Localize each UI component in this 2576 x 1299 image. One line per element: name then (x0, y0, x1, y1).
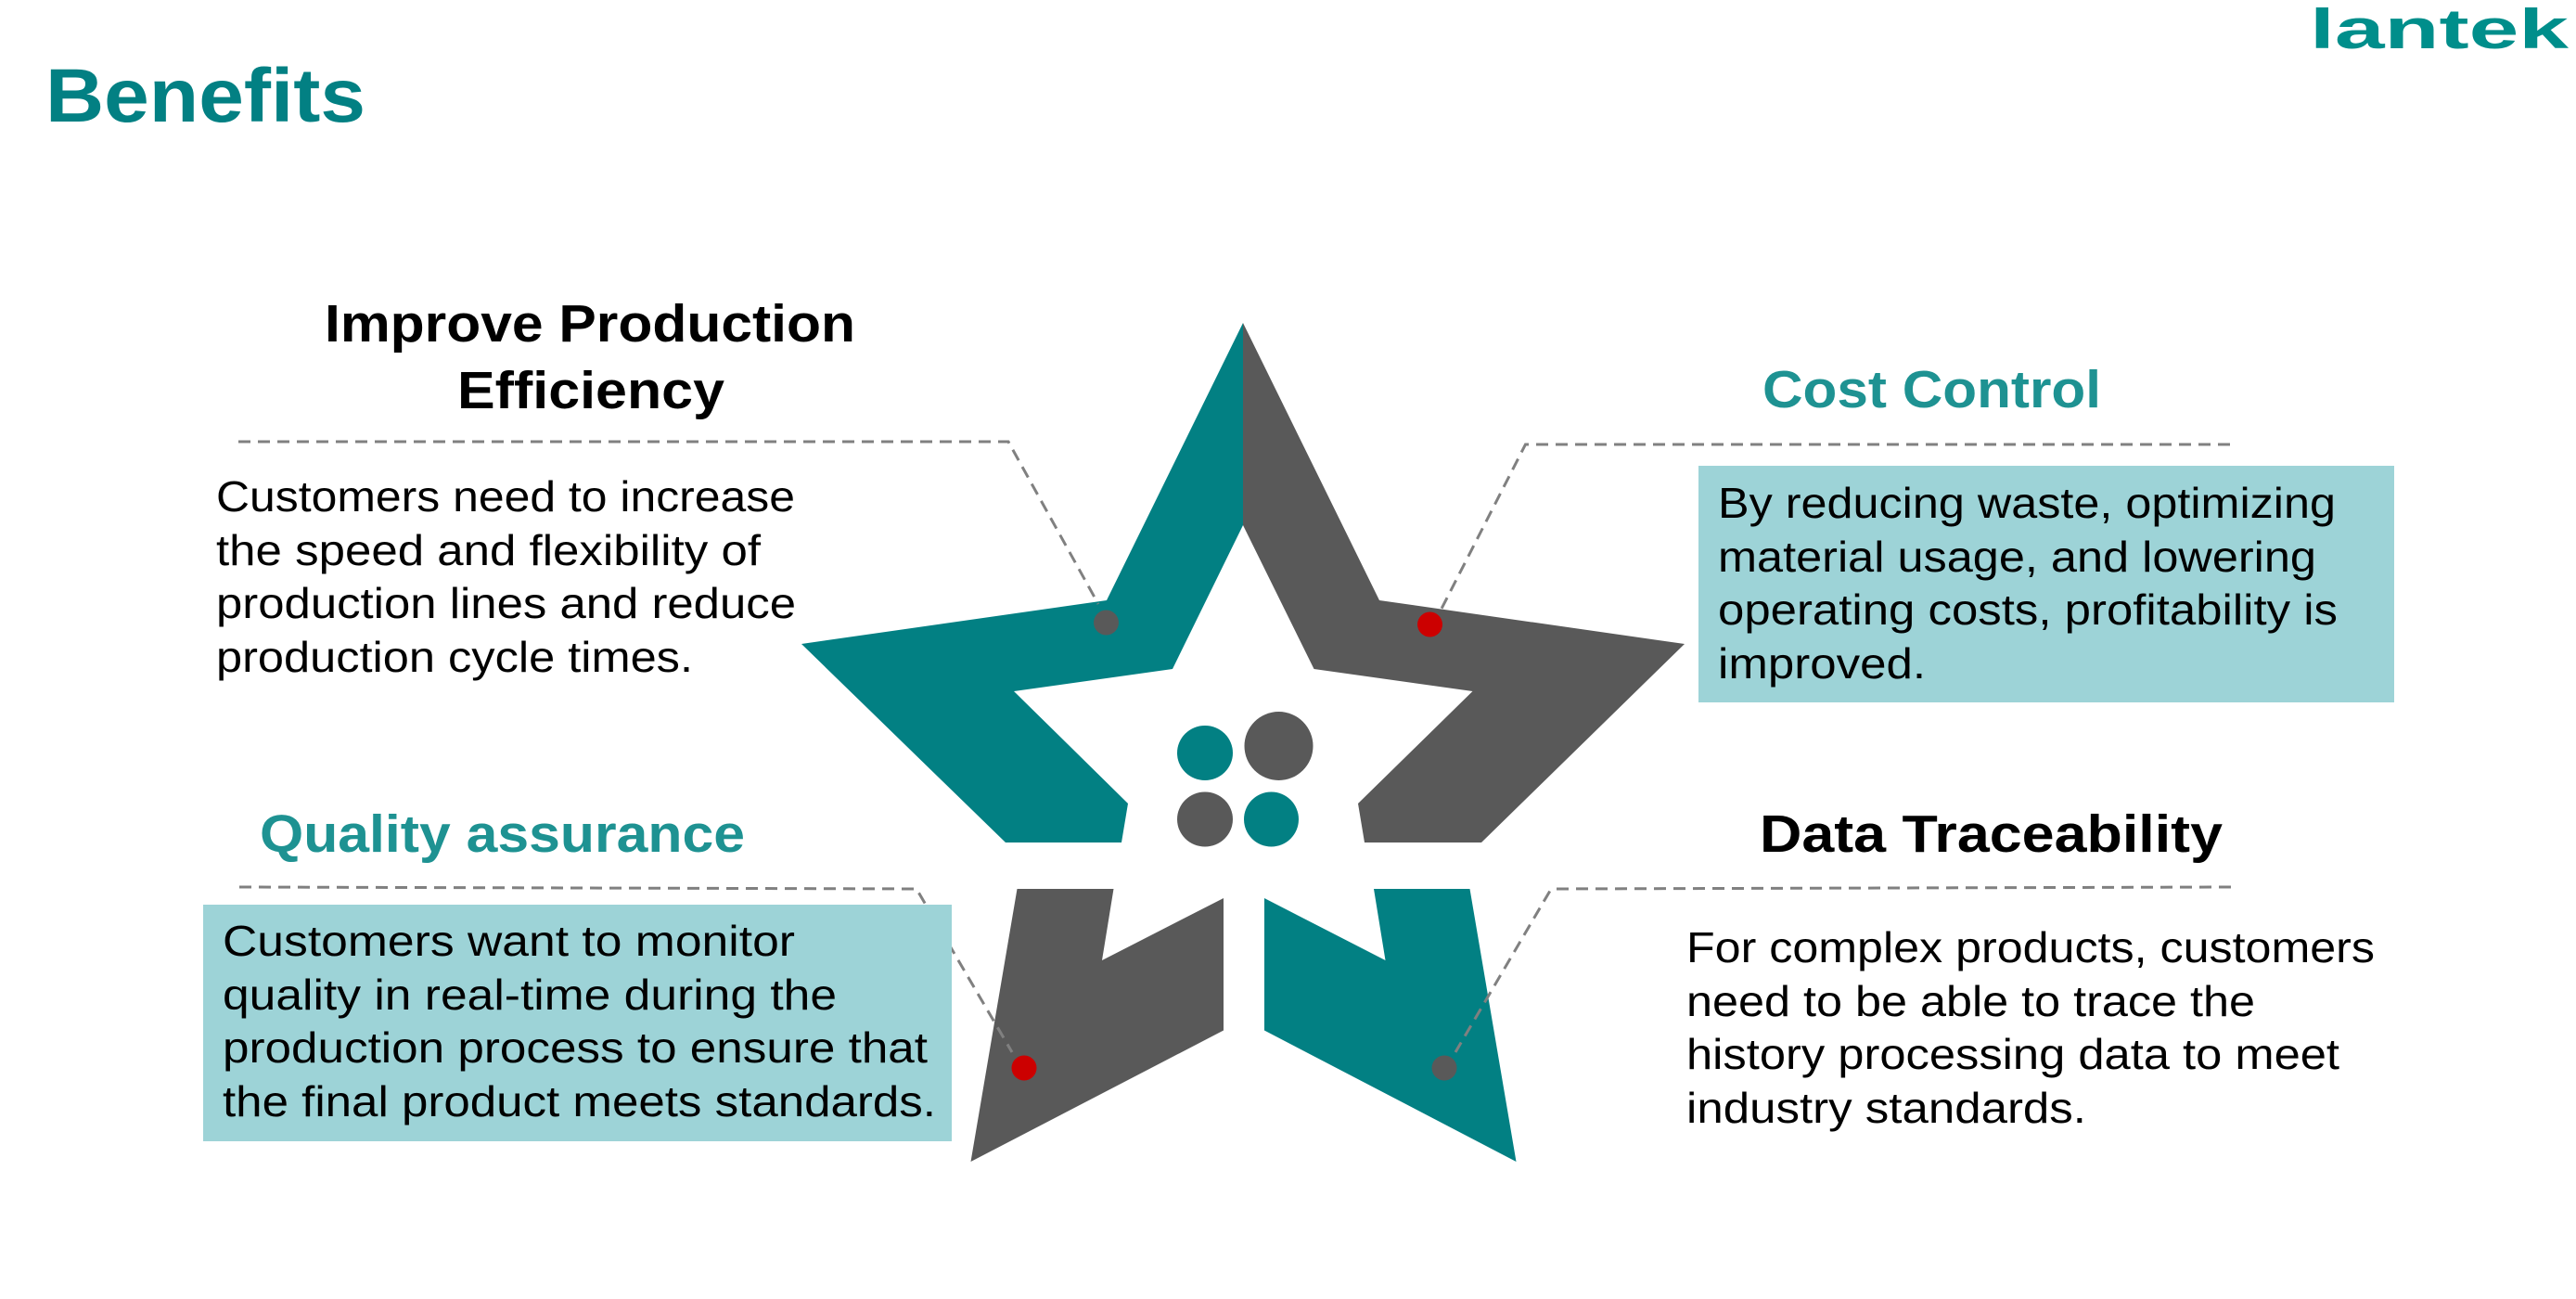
panel: improve production efficiency (216, 294, 1119, 681)
leader line (238, 442, 1098, 604)
marker dot (1432, 1056, 1456, 1080)
body text: need to be able to trace the (1686, 977, 2255, 1025)
highlight box (203, 905, 952, 1141)
leader line (239, 887, 1012, 1052)
center circle: gray bottom left (1177, 792, 1233, 846)
star graphic (801, 323, 1685, 1162)
body text: production lines and reduce (216, 579, 796, 627)
body text (223, 917, 936, 1125)
body text: For complex products, customers (1686, 923, 2375, 971)
center circle: teal bottom right (1244, 792, 1299, 846)
marker dot (1011, 1056, 1037, 1080)
star segment: upper right gray (1243, 323, 1685, 842)
heading: Quality assurance (260, 804, 745, 864)
logo: lantek: lantek (2310, 0, 2570, 60)
body text: Customers want to monitor (223, 917, 795, 965)
heading: Data Traceability (1760, 804, 2223, 864)
body text: the final product meets standards. (223, 1077, 936, 1125)
leader line (1455, 887, 2231, 1052)
body text: history processing data to meet (1686, 1030, 2339, 1078)
body text: material usage, and lowering (1718, 533, 2316, 581)
body text: improved. (1718, 639, 1926, 688)
star segment: lower right teal (1264, 889, 1516, 1162)
body text: By reducing waste, optimizing (1718, 479, 2336, 527)
marker dot (1094, 611, 1119, 635)
center circle: gray top right (1245, 712, 1314, 780)
body text (216, 472, 796, 681)
panel: quality assurance (203, 804, 1037, 1141)
heading: Improve Production (325, 294, 855, 354)
body text: quality in real-time during the (223, 971, 837, 1019)
heading: Cost Control (1762, 360, 2101, 419)
marker dot (1417, 612, 1442, 637)
body text (1718, 479, 2338, 688)
star segment: upper left teal (801, 323, 1243, 842)
body text: the speed and flexibility of (216, 526, 761, 574)
leader line (1442, 444, 2230, 609)
body text: operating costs, profitability is (1718, 585, 2338, 634)
panel: data traceability (1432, 804, 2375, 1132)
heading: Efficiency (457, 361, 724, 420)
title: Benefits (45, 54, 365, 138)
center circle: teal top left (1177, 726, 1233, 780)
body text: industry standards. (1686, 1084, 2086, 1132)
panel: cost control (1417, 360, 2394, 702)
body text: production process to ensure that (223, 1023, 928, 1072)
star segment: lower left gray (970, 889, 1224, 1162)
highlight box (1698, 466, 2394, 702)
body text: production cycle times. (216, 633, 693, 681)
body text: Customers need to increase (216, 472, 795, 521)
body text (1686, 923, 2375, 1132)
